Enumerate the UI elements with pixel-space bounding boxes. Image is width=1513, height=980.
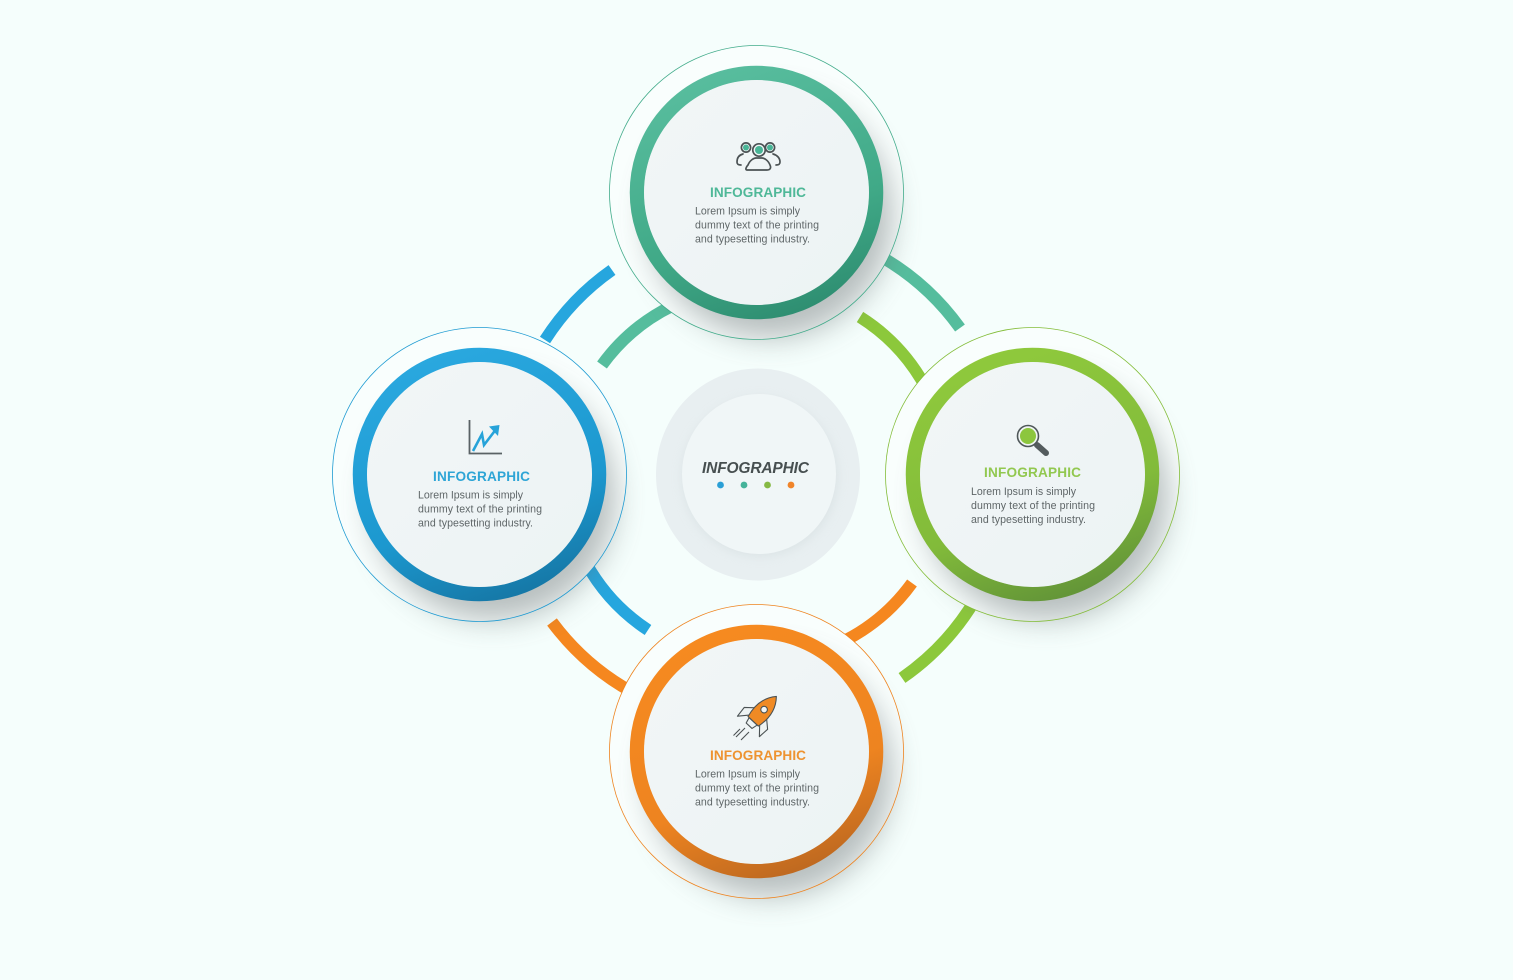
panel: right green xyxy=(886,328,1180,622)
arc: orange outer bottom-left xyxy=(552,622,632,692)
icon: rocket xyxy=(734,686,788,740)
panel: bottom orange xyxy=(610,604,904,898)
arc: blue inner bottom-left xyxy=(586,563,648,630)
center outer ring xyxy=(656,368,860,580)
heading: INFOGRAPHIC xyxy=(984,465,1081,480)
arc: orange inner bottom-right xyxy=(846,583,912,640)
center inner shadow xyxy=(682,397,838,557)
arc: teal inner top-left xyxy=(602,306,672,365)
arc: blue outer top-left xyxy=(545,270,612,340)
body text: Lorem Ipsum is simply xyxy=(695,768,801,780)
body text xyxy=(695,206,819,246)
body text xyxy=(695,768,819,808)
heading: INFOGRAPHIC xyxy=(433,469,530,484)
body text: dummy text of the printing xyxy=(695,220,819,232)
panel: top teal xyxy=(610,46,904,340)
body text: and typesetting industry. xyxy=(695,796,810,808)
body text: and typesetting industry. xyxy=(971,514,1086,526)
center inner disk xyxy=(682,394,836,554)
center circle xyxy=(656,368,860,580)
body text: Lorem Ipsum is simply xyxy=(695,206,801,218)
panel: left blue xyxy=(332,328,626,622)
body text: dummy text of the printing xyxy=(971,500,1095,512)
arc: teal outer top-right xyxy=(880,256,960,328)
arc: green inner top-right xyxy=(860,317,925,386)
center colour dots xyxy=(717,482,794,488)
body text: dummy text of the printing xyxy=(695,782,819,794)
center title: INFOGRAPHIC xyxy=(702,460,810,477)
icon: growth chart xyxy=(470,420,502,454)
body text xyxy=(418,490,542,530)
arc: green outer bottom-right xyxy=(902,600,975,678)
icon: magnifier xyxy=(1018,426,1046,453)
body text: Lorem Ipsum is simply xyxy=(971,486,1077,498)
body text xyxy=(971,486,1095,526)
body text: Lorem Ipsum is simply xyxy=(418,490,524,502)
body text: dummy text of the printing xyxy=(418,504,542,516)
heading: INFOGRAPHIC xyxy=(710,748,806,763)
heading: INFOGRAPHIC xyxy=(710,185,806,200)
body text: and typesetting industry. xyxy=(418,518,533,530)
icon: people xyxy=(737,143,780,170)
connector arcs xyxy=(545,256,975,692)
body text: and typesetting industry. xyxy=(695,234,810,246)
